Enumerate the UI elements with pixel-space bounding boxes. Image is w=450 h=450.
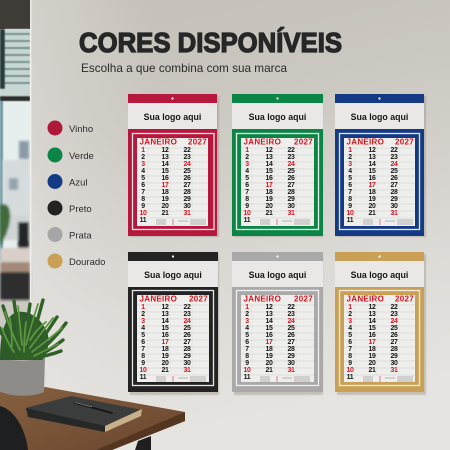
calendar: Vinho: 3 [141,161,145,168]
calendar: Preto: 28 [183,346,191,353]
calendar: Prata: 19 [265,353,273,360]
calendar: Azul: 29 [390,196,398,203]
calendar: Prata: 20 [265,360,273,367]
calendar: Prata: 31 [287,367,295,374]
calendar: Dourado [335,252,426,395]
calendar: Vinho: 23 [183,154,191,161]
calendar: Prata: 8 [245,353,249,360]
calendar: Verde: 27 [287,182,295,189]
calendar: Preto: 11 [140,374,147,381]
calendar: Preto: 29 [183,353,191,360]
calendar: Preto: 26 [183,332,191,339]
calendar: Vinho: 28 [183,189,191,196]
calendar: Dourado: 22 [390,304,398,311]
calendar: Dourado: 8 [348,353,352,360]
calendar: Vinho: 21 [161,210,169,217]
calendar: Azul: 19 [368,196,376,203]
legend: Verde: Verde [69,151,94,162]
calendar: Preto: 14 [161,318,169,325]
desk [0,387,185,450]
calendar: Azul: JANEIRO [346,138,384,146]
calendar: Prata: JANEIRO [244,294,281,304]
pen [75,402,112,413]
calendar: Preto: 20 [161,360,169,367]
calendar: Verde: 17 [265,182,273,189]
calendar: Prata: Sua logo aqui [249,270,306,280]
calendar: Prata: 26 [287,332,295,339]
calendar: Verde: 5 [245,175,249,182]
calendar: Vinho: 7 [141,189,145,196]
calendar: Vinho: 17 [161,182,169,189]
calendar: Vinho: 8 [141,196,145,203]
calendar: Vinho: 9 [141,203,145,210]
title: CORES DISPONÍVEIS [79,27,342,58]
calendar: Preto: JANEIRO [140,294,177,304]
calendar: Prata: 13 [265,311,273,318]
calendar: Azul: 2027 [395,138,414,146]
calendar: Prata: 16 [265,332,273,339]
calendar: Prata: 2 [245,311,249,318]
calendar: Vinho: 2 [141,154,145,161]
calendar: Verde: 28 [287,189,295,196]
calendar: Preto: 25 [183,325,191,332]
calendar: Vinho: 19 [161,196,169,203]
calendar: Vinho: 25 [183,168,191,175]
calendar: Verde: 23 [287,154,295,161]
calendar: Dourado: 12 [368,304,376,311]
calendar: Vinho: 6 [141,182,145,189]
calendar: Prata: 4 [245,325,249,332]
calendar: Azul: 7 [348,189,352,196]
calendar: Dourado: 26 [390,332,398,339]
calendar: Preto: 21 [161,367,169,374]
calendar: Dourado: 14 [368,318,376,325]
calendar: Preto: 2027 [189,294,208,304]
calendar: Preto: 22 [183,304,191,311]
calendar: Vinho: 27 [183,182,191,189]
calendar: Vinho: 11 [140,217,147,224]
calendar: Verde: 15 [265,168,273,175]
calendar: Verde: JANEIRO [244,138,281,146]
calendar: Azul: 26 [390,175,398,182]
calendar: Dourado: 31 [390,367,398,374]
calendar: Vinho: 1 [141,147,145,154]
calendar: Vinho: 22 [183,147,191,154]
background: wall edge [30,0,31,450]
calendar: Azul: Sua logo aqui [351,112,408,122]
calendar: Prata: 11 [244,374,251,381]
calendar: Prata: 3 [245,318,249,325]
calendar: Azul: 27 [390,182,398,189]
calendar: Azul: 28 [390,189,398,196]
calendar: Dourado: 29 [390,353,398,360]
calendar: Prata: 2027 [294,294,313,304]
calendar: Prata: 9 [245,360,249,367]
calendar: Prata: 27 [287,339,295,346]
calendar: Dourado: 18 [368,346,376,353]
calendar: Dourado: 2 [348,311,352,318]
calendar: Prata: 28 [287,346,295,353]
calendar: Vinho: 18 [161,189,169,196]
legend: Preto: Preto [69,204,92,215]
calendar: Verde: Sua logo aqui [249,112,306,122]
calendar: Prata: 6 [245,339,249,346]
calendar: Azul: 16 [368,175,376,182]
calendar: Azul: 6 [348,182,352,189]
calendar: Azul: 10 [346,210,354,217]
legend: Dourado: Dourado [69,257,105,268]
calendar: Dourado: 17 [368,339,376,346]
calendar: Dourado: JANEIRO [346,294,384,304]
calendar: Azul: 21 [368,210,376,217]
calendar: Azul: 25 [390,168,398,175]
calendar: Prata: 12 [265,304,273,311]
calendar: Azul: 24 [390,161,398,168]
calendar: Dourado: 15 [368,325,376,332]
calendar: Preto: 3 [141,318,145,325]
leaves [0,300,66,360]
calendar: Prata: 17 [265,339,273,346]
calendar: Dourado: 28 [390,346,398,353]
calendar: Dourado: 25 [390,325,398,332]
calendar: Preto: 10 [139,367,147,374]
pot [0,357,45,396]
calendar: Dourado: 4 [348,325,352,332]
calendar: Preto: 17 [161,339,169,346]
calendar: Vinho: 5 [141,175,145,182]
calendar: Prata: 30 [287,360,295,367]
calendar: Vinho: 13 [161,154,169,161]
calendar: Preto: 24 [183,318,191,325]
calendar: Verde: 30 [287,203,295,210]
legend: Preto [48,200,92,216]
plant [0,300,66,396]
calendar: Vinho: 15 [161,168,169,175]
calendar: Verde: 26 [287,175,295,182]
calendar: Prata: 29 [287,353,295,360]
calendar: Dourado: 5 [348,332,352,339]
calendar: Azul: 9 [348,203,352,210]
calendar: Prata: 5 [245,332,249,339]
calendar: Azul: 5 [348,175,352,182]
calendar: Prata: 7 [245,346,249,353]
calendar: Verde: 12 [265,147,273,154]
calendar: Preto: Sua logo aqui [144,270,202,280]
calendar: Preto: 8 [141,353,145,360]
calendar: Verde: 21 [265,210,273,217]
calendar: Prata [232,252,323,395]
calendar: Prata: 10 [243,367,251,374]
calendar: Preto: 6 [141,339,145,346]
calendar: Azul: 12 [368,147,376,154]
calendar: Prata: 14 [265,318,273,325]
calendar: Preto: 9 [141,360,145,367]
calendar: Verde: 19 [265,196,273,203]
calendar: Verde: 13 [265,154,273,161]
calendar: Preto: 27 [183,339,191,346]
calendar: Azul: 1 [348,147,352,154]
calendar: Verde: 2 [245,154,249,161]
calendar: Vinho: 10 [139,210,147,217]
calendar: Dourado: 19 [368,353,376,360]
calendar: Dourado: 6 [348,339,352,346]
calendar: Dourado: 2027 [395,294,414,304]
calendar: Verde: 31 [287,210,295,217]
calendar: Verde [232,94,323,237]
legend [48,120,105,268]
calendar: Dourado: 24 [390,318,398,325]
calendar: Prata: 15 [265,325,273,332]
chair [0,406,28,450]
calendar: Prata: 23 [287,311,295,318]
calendar: Preto: 31 [183,367,191,374]
calendar: Prata: 24 [287,318,295,325]
calendar: Verde: 4 [245,168,249,175]
calendar: Verde: 9 [245,203,249,210]
legend: Dourado [48,254,105,268]
calendar: Verde: 24 [287,161,295,168]
calendar: Vinho: 12 [161,147,169,154]
calendar: Azul: 15 [368,168,376,175]
calendar: Dourado: Sua logo aqui [351,270,408,280]
legend: Prata [48,227,92,242]
calendar: Prata: 22 [287,304,295,311]
calendar: Preto: 16 [161,332,169,339]
calendar: Verde: 29 [287,196,295,203]
calendar: Dourado: 21 [368,367,376,374]
legend: Prata: Prata [69,230,92,242]
legend: Azul [48,174,87,189]
calendar: Vinho: 31 [183,210,191,217]
calendar: Dourado: 9 [348,360,352,367]
calendar: Azul: 18 [368,189,376,196]
calendar: Verde: 25 [287,168,295,175]
calendar: Verde: 11 [244,217,251,224]
calendar: Verde: 10 [243,210,251,217]
calendar: Vinho: JANEIRO [140,138,177,146]
calendar: Azul: 14 [368,161,376,168]
calendar: Preto: 15 [161,325,169,332]
calendar: Preto: 7 [141,346,145,353]
calendar: Dourado: 20 [368,360,376,367]
subtitle: Escolha a que combina com sua marca [81,61,287,75]
calendar: Prata: 21 [265,367,273,374]
calendar: Azul: 17 [368,182,376,189]
calendar: Azul: 3 [348,161,352,168]
calendar: Verde: 22 [287,147,295,154]
calendar: Azul: 30 [390,203,398,210]
calendar: Azul: 4 [348,168,352,175]
calendar: Vinho: 4 [141,168,145,175]
calendar: Azul: 2 [348,154,352,161]
calendar: Azul [335,94,426,237]
background: office window [0,0,30,300]
calendar: Dourado: 7 [348,346,352,353]
calendar: Dourado: 10 [346,367,354,374]
calendar: Azul: 11 [347,217,354,224]
calendar: Azul: 13 [368,154,376,161]
calendar: Azul: 23 [390,154,398,161]
calendar: Verde: 1 [245,147,249,154]
legend: Azul: Azul [69,178,87,188]
calendar: Verde: 8 [245,196,249,203]
calendar: Verde: 16 [265,175,273,182]
calendar: Preto: 2 [141,311,145,318]
calendar: Verde: 20 [265,203,273,210]
calendar: Preto: 1 [141,304,145,311]
calendar: Vinho: 26 [183,175,191,182]
calendar: Preto: 12 [161,304,169,311]
calendar: Vinho: 16 [161,175,169,182]
calendar: Azul: 22 [390,147,398,154]
calendar: Preto: 4 [141,325,145,332]
calendar: Dourado: 13 [368,311,376,318]
calendar: Prata: 18 [265,346,273,353]
legend: Vinho: Vinho [69,124,93,135]
calendar: Dourado: 27 [390,339,398,346]
calendar: Preto: 5 [141,332,145,339]
calendar: Prata: 1 [245,304,249,311]
calendar: Vinho: 24 [183,161,191,168]
calendar: Preto: 23 [183,311,191,318]
calendar: Verde: 14 [265,161,273,168]
calendar: Azul: 20 [368,203,376,210]
legend: Vinho [48,120,93,136]
calendar: Verde: 7 [245,189,249,196]
calendar: Vinho: Sua logo aqui [144,112,201,122]
calendar: Azul: 8 [348,196,352,203]
calendar: Vinho: 20 [161,203,169,210]
calendar: Verde: 6 [245,182,249,189]
calendar: Dourado: 16 [368,332,376,339]
calendar: Preto [128,252,219,395]
calendar: Vinho: 29 [183,196,191,203]
calendar: Verde: 2027 [294,138,313,146]
calendar: Azul: 31 [390,210,398,217]
calendar: Dourado: 3 [348,318,352,325]
calendar: Prata: 25 [287,325,295,332]
calendar: Vinho: 30 [183,203,191,210]
calendar: Vinho: 2027 [188,138,207,146]
calendar: Vinho: 14 [161,161,169,168]
calendar: Verde: 3 [245,161,249,168]
calendar: Verde: 18 [265,189,273,196]
calendar: Preto: 18 [161,346,169,353]
calendar: Preto: 19 [161,353,169,360]
calendar: Dourado: 1 [348,304,352,311]
calendar: Dourado: 11 [347,374,354,381]
calendar: Preto: 30 [183,360,191,367]
calendar: Vinho [128,94,219,237]
notebook [26,396,142,432]
calendar: Preto: 13 [161,311,169,318]
calendar: Dourado: 23 [390,311,398,318]
calendar: Dourado: 30 [390,360,398,367]
legend: Verde [48,148,94,162]
